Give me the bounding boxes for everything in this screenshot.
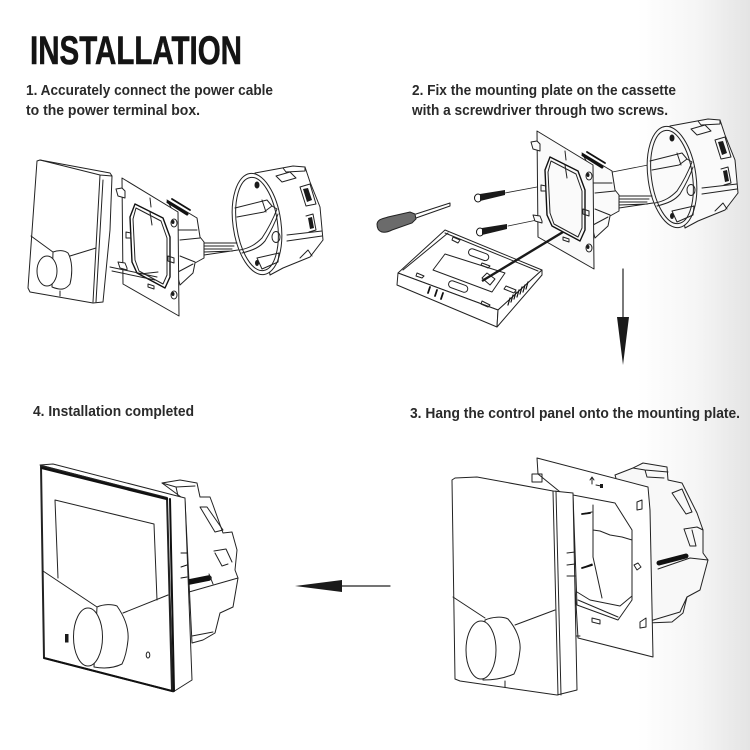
screw 2	[476, 224, 507, 236]
step 1 text	[26, 83, 273, 119]
diagram: step 3 panel onto plate	[452, 458, 708, 695]
step 2 text: 2. Fix the mounting plate on the cassette	[412, 83, 676, 99]
screw guide lines	[505, 165, 648, 226]
control panel	[28, 160, 112, 303]
step 1 text: to the power terminal box.	[26, 103, 200, 119]
step 1 text: 1. Accurately connect the power cable	[26, 83, 273, 99]
step 3 text: 3. Hang the control panel onto the mounting plate.	[410, 406, 740, 422]
step 2 text	[411, 83, 676, 119]
mounting base	[397, 230, 542, 327]
title: INSTALLATION	[30, 29, 242, 73]
module behind panel	[162, 480, 238, 643]
control panel	[452, 477, 577, 695]
screwdriver	[377, 203, 450, 232]
step 4 text: 4. Installation completed	[33, 404, 194, 420]
diagram: step 4 installed	[40, 464, 238, 692]
wire to plate	[482, 232, 563, 281]
diagram: step 1 exploded view	[28, 160, 323, 316]
cable from panel to plate	[110, 267, 158, 280]
arrow: down	[617, 269, 629, 365]
module behind plate	[615, 463, 708, 623]
step 2 text: with a screwdriver through two screws.	[411, 103, 668, 119]
diagram: step 2 mounting plate	[377, 119, 738, 327]
arrow: left	[295, 580, 390, 592]
mounting plate	[532, 458, 653, 657]
installed panel	[40, 464, 192, 692]
screw 1	[474, 190, 505, 202]
